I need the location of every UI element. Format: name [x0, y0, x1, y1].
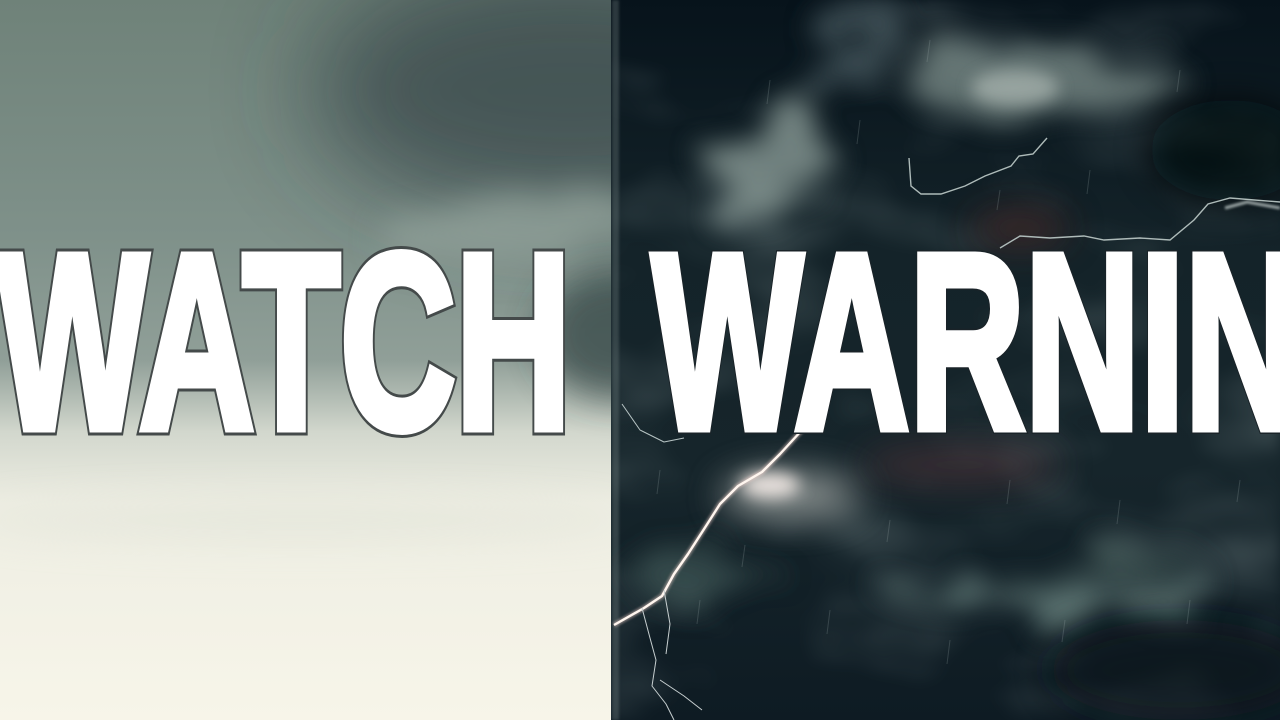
heading: WATCH [0, 202, 571, 481]
icon: upper lightning branches [909, 138, 1280, 248]
heading: WATCH: WATCH [0, 202, 571, 481]
panel: warning storm [611, 0, 1280, 720]
panel: watch sky [0, 0, 611, 720]
icon: rain streaks [657, 40, 1240, 664]
heading: WATCH: WATCH [0, 202, 571, 481]
icon: main lightning bolt [614, 404, 802, 720]
